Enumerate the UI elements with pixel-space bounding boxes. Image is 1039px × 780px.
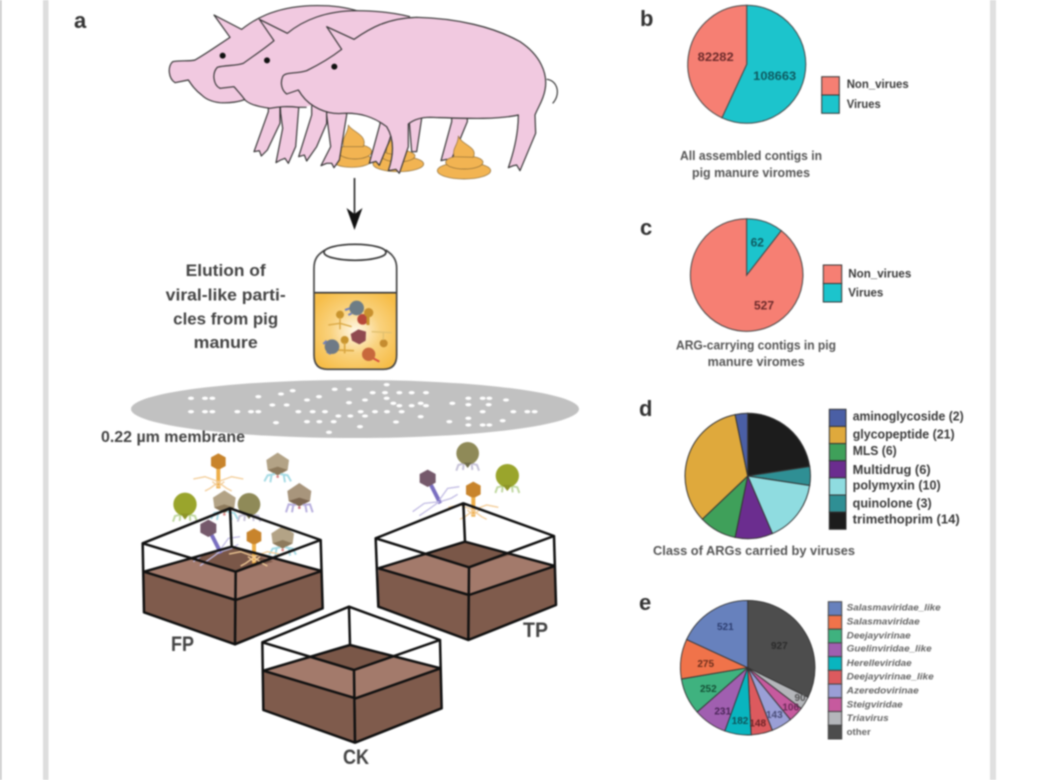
pie values b: 82282 (698, 50, 734, 64)
legend d: Multidrug (6) (853, 463, 931, 477)
panel c: ARG-carrying contigs (640, 215, 912, 369)
panel e: viral families (639, 590, 941, 739)
caption c: manure viromes (708, 355, 805, 369)
caption b: pig manure viromes (692, 166, 810, 180)
legend d (829, 409, 964, 529)
caption c: ARG-carrying contigs in pig (676, 338, 836, 352)
pie values b: 108663 (753, 69, 797, 83)
pie chart e (680, 600, 815, 735)
label: TP: TP (523, 619, 548, 642)
pie values e: 90 (794, 693, 806, 704)
manure pile 2 (373, 137, 424, 172)
legend e: other (847, 727, 871, 737)
label: FP: FP (171, 633, 194, 656)
phages above TP (413, 442, 519, 519)
legend e: Triavirus (847, 713, 889, 723)
legend d: glycopeptide (21) (853, 427, 955, 441)
legend e: Steigviridae (847, 699, 903, 709)
pie values c: 62 (751, 236, 764, 250)
text: elution step: viral-like parti- (166, 286, 286, 304)
box: FP soil with phages (143, 453, 323, 644)
text: elution step (166, 262, 286, 352)
legend e: Deejayvirinae (847, 630, 911, 640)
pie values e (697, 622, 806, 730)
legend b: Virues (847, 97, 881, 111)
legend e: Guelinviridae_like (847, 644, 932, 654)
icon: jar of viral particles (314, 244, 397, 369)
pie chart d (685, 413, 810, 539)
legend c: Non_virues (848, 266, 912, 280)
pie values c: 527 (754, 298, 774, 312)
leg: middle pig near (321, 103, 347, 168)
legend d: polymyxin (10) (853, 478, 941, 492)
legend d: quinolone (3) (853, 496, 932, 510)
legend e: Salasmaviridae (847, 616, 920, 626)
text: elution step: manure (194, 334, 258, 352)
legend e (828, 602, 941, 739)
phages above FP (173, 453, 313, 566)
pie values e: 148 (749, 718, 766, 730)
pig: back (169, 6, 360, 163)
caption b (680, 149, 822, 180)
panel label e: e (639, 590, 651, 615)
panel label a: a (74, 8, 87, 33)
manure pile 1 (332, 125, 372, 167)
legend e: Deejayvirinae_like (847, 672, 934, 682)
legend d: trimethoprim (14) (853, 512, 960, 526)
pie values b (698, 50, 797, 83)
panel d: class of ARGs (639, 396, 964, 558)
caption b: All assembled contigs in (680, 149, 822, 163)
legend e: Herelleviridae (847, 658, 912, 668)
pie values e: 106 (782, 702, 799, 714)
legend b: Non_virues (847, 77, 909, 91)
legend b (822, 77, 909, 113)
pie chart c (690, 219, 803, 331)
pie values e: 927 (771, 641, 788, 652)
text: elution step: Elution of (186, 262, 266, 280)
label: membrane: 0.22 µm membrane (101, 429, 245, 446)
label: CK: CK (343, 746, 369, 769)
legend c: Virues (848, 286, 884, 300)
illustration: three pigs with manure (169, 6, 557, 179)
legend c (823, 265, 912, 302)
pie chart b (688, 5, 806, 123)
legend e: Salasmaviridae_like (847, 603, 941, 613)
panel a: experimental workflow (74, 6, 579, 769)
pie values e: 231 (714, 706, 731, 718)
panel label d: d (639, 396, 652, 421)
membrane: filter with pores (131, 380, 579, 438)
pie values e: 521 (717, 622, 734, 633)
pie values e: 182 (732, 716, 749, 727)
pig: middle (214, 11, 467, 163)
box: TP soil with phages (376, 442, 556, 640)
text: elution step: cles from pig (173, 310, 278, 328)
panel b: all assembled contigs (640, 5, 909, 180)
manure pile 3 (437, 136, 491, 179)
panel label c: c (640, 215, 652, 240)
legend d: MLS (6) (853, 444, 897, 458)
pig: front (281, 17, 557, 173)
box: CK control soil (262, 607, 442, 743)
arrow: pigs to jar (346, 178, 362, 230)
pie values c (751, 236, 774, 312)
caption c (676, 338, 836, 369)
panel label b: b (640, 6, 653, 31)
pie values e: 143 (766, 710, 783, 721)
caption d: Class of ARGs carried by viruses (653, 544, 855, 558)
pie values e: 252 (700, 684, 717, 695)
pie values e: 275 (697, 659, 714, 670)
legend d: aminoglycoside (2) (853, 410, 964, 424)
legend e: Azeredovirinae (846, 685, 919, 695)
